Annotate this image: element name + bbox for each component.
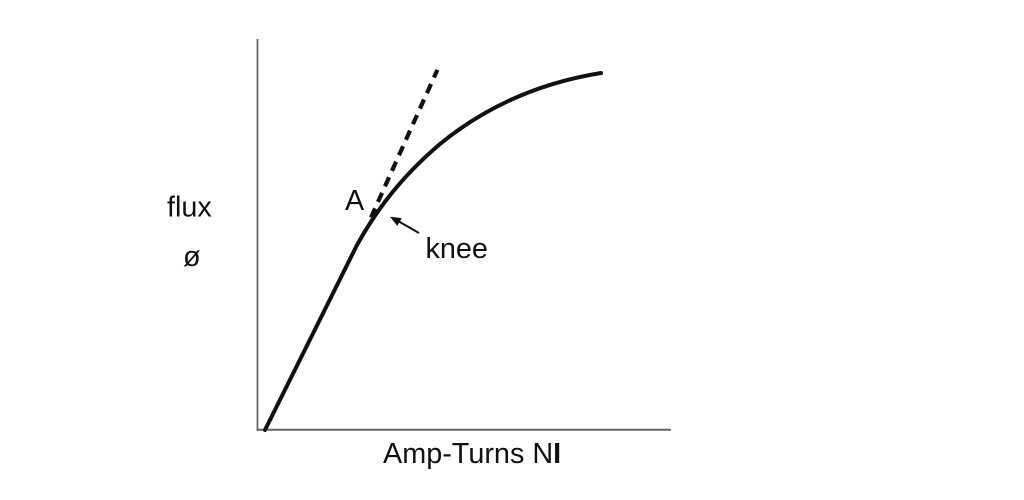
magnetization curve (265, 73, 601, 430)
label: flux: flux (167, 192, 212, 224)
label: point A: A (345, 185, 365, 217)
label: phi symbol: ø (183, 241, 201, 273)
label: knee: knee (426, 233, 488, 265)
dashed tangent line (371, 70, 437, 218)
knee arrow (390, 217, 419, 233)
x axis (257, 429, 671, 431)
y axis (256, 39, 258, 431)
x axis label: Amp-Turns NI (383, 438, 561, 470)
